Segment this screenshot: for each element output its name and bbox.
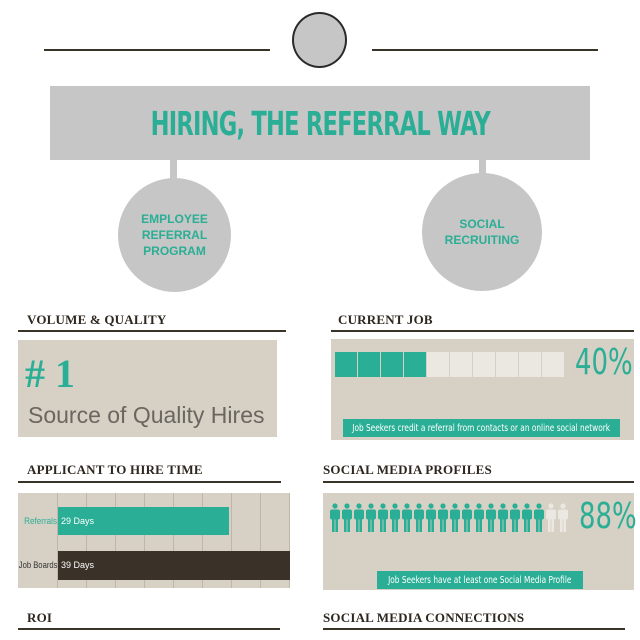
heading: social media profiles: SOCIAL MEDIA PROFILES — [323, 462, 492, 477]
panel: bar chart: 29 Days — [61, 516, 94, 526]
panel: bar chart: 39 Days — [61, 560, 94, 570]
source text: Source of Quality Hires — [28, 402, 264, 428]
#1: # 1 — [25, 351, 75, 396]
title banner: HIRING, THE REFERRAL WAY — [150, 104, 490, 142]
heading: ROI: ROI — [27, 610, 52, 625]
heading: social media connections: SOCIAL MEDIA CONNECTIONS — [323, 610, 524, 625]
panel: bar chart — [18, 493, 290, 588]
title banner — [50, 86, 590, 160]
caption — [343, 419, 620, 437]
circle: employee referral program: REFERRAL — [142, 228, 207, 242]
caption — [377, 571, 583, 589]
connector left — [170, 160, 177, 186]
panel: volume & quality — [18, 340, 277, 437]
circle: social recruiting: SOCIAL — [459, 217, 505, 231]
circle: employee referral program: PROGRAM — [143, 244, 206, 258]
circle: social recruiting — [422, 173, 542, 291]
heading: applicant to hire time: APPLICANT TO HIRE TIME — [27, 462, 203, 477]
top ornament lines — [44, 49, 270, 51]
squares — [335, 352, 564, 377]
caption: Job Seekers have at least one Social Media Profile — [388, 574, 572, 586]
top circle — [292, 12, 347, 68]
connector right — [479, 160, 486, 186]
caption: Job Seekers credit a referral from contacts or an online social network — [353, 422, 610, 434]
40%: 40% — [575, 342, 633, 383]
circle: social recruiting: RECRUITING — [445, 233, 519, 247]
heading: volume & quality: VOLUME & QUALITY — [27, 312, 166, 327]
people icons — [330, 503, 568, 532]
heading: current job: CURRENT JOB — [338, 312, 433, 327]
panel: social media profiles — [323, 493, 634, 590]
88%: 88% — [579, 496, 637, 537]
panel: current job — [331, 339, 634, 440]
bar referrals: Referrals — [24, 516, 57, 526]
circle: employee referral program: EMPLOYEE — [141, 212, 208, 226]
circle: employee referral program — [118, 178, 231, 292]
bar job boards: Job Boards — [19, 560, 57, 570]
